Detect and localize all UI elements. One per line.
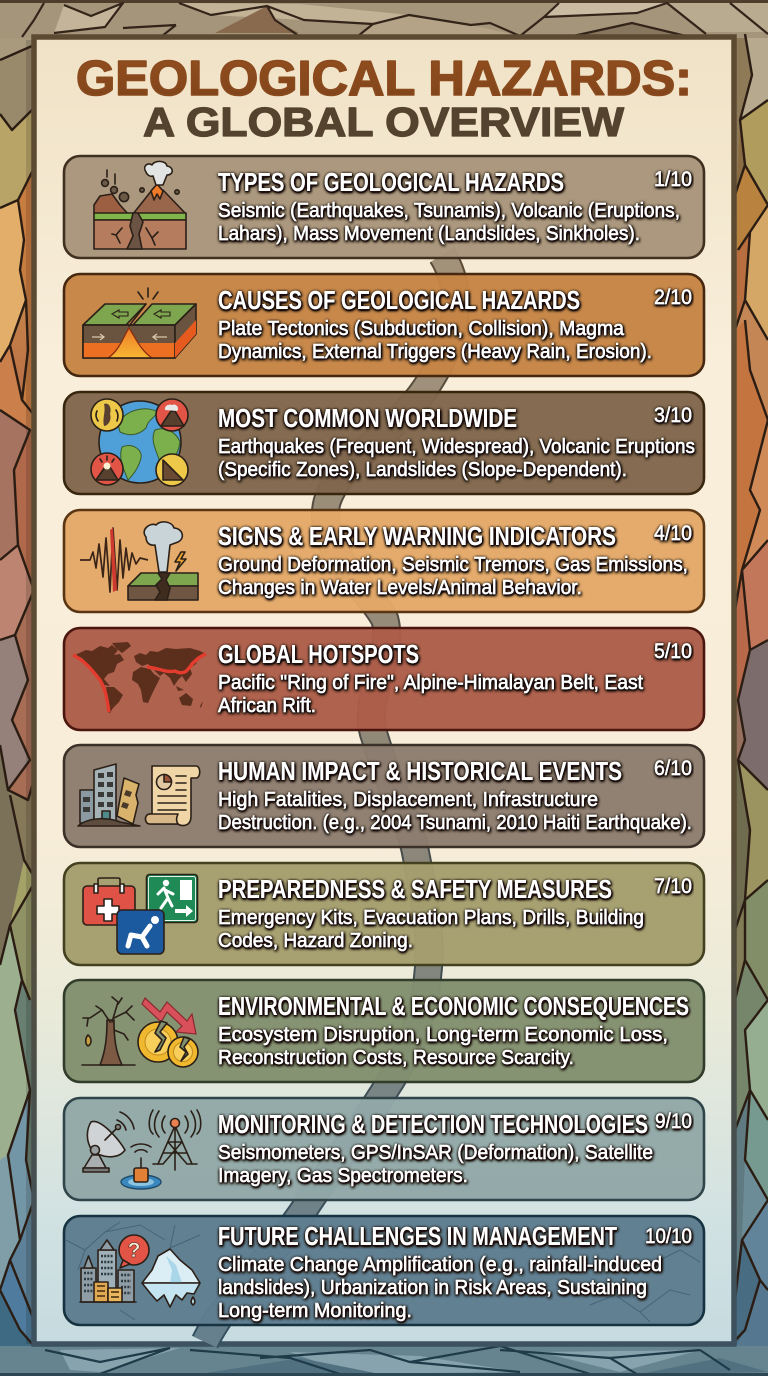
page number: 7/10 <box>654 875 692 898</box>
panel 3: most common worldwide <box>64 392 704 494</box>
heading: CAUSES OF GEOLOGICAL HAZARDS <box>218 287 580 315</box>
page number: 1/10 <box>654 168 692 191</box>
panel 7: preparedness and safety measures <box>64 863 704 965</box>
page number: 3/10 <box>654 404 692 427</box>
description: Imagery, Gas Spectrometers. <box>218 1164 468 1187</box>
page number: 4/10 <box>654 522 692 545</box>
description: Seismic (Earthquakes, Tsunamis), Volcanic (Eruptions, <box>218 199 680 222</box>
panel 10: future challenges in management <box>64 1216 704 1325</box>
title: GEOLOGICAL HAZARDS: <box>76 52 692 106</box>
panel 1: types of geological hazards <box>64 156 704 258</box>
heading: MONITORING & DETECTION TECHNOLOGIES <box>218 1111 648 1139</box>
heading: SIGNS & EARLY WARNING INDICATORS <box>218 523 616 551</box>
heading: HUMAN IMPACT & HISTORICAL EVENTS <box>218 758 622 786</box>
page number: 2/10 <box>654 286 692 309</box>
description: Lahars), Mass Movement (Landslides, Sinkholes). <box>218 222 640 245</box>
description: Ecosystem Disruption, Long-term Economic Loss, <box>218 1023 668 1046</box>
top rock band <box>0 3 768 38</box>
icon: city, question bubble and iceberg <box>80 1235 200 1307</box>
icon: damaged buildings and records scroll <box>78 764 200 826</box>
description: Dynamics, External Triggers (Heavy Rain, Erosion). <box>218 340 652 363</box>
description: Climate Change Amplification (e.g., rainfall-induced <box>218 1253 662 1276</box>
icon: tectonic plates and magma <box>83 288 196 358</box>
page number: 6/10 <box>654 757 692 780</box>
page number: 9/10 <box>655 1110 692 1133</box>
description: Reconstruction Costs, Resource Scarcity. <box>218 1046 574 1069</box>
description: High Fatalities, Displacement, Infrastructure <box>218 788 598 811</box>
description: landslides), Urbanization in Risk Areas, Sustaining <box>218 1276 647 1299</box>
icon: volcano, fissure and falling rocks <box>94 161 186 249</box>
icon: first aid kit, exit sign, drop and cover sign <box>83 874 198 954</box>
description: (Specific Zones), Landslides (Slope-Dependent). <box>218 458 627 481</box>
central crack running behind panels <box>205 255 456 1342</box>
icon: city, question bubble and iceberg: ? <box>128 1239 140 1262</box>
description: Plate Tectonics (Subduction, Collision), Magma <box>218 317 625 340</box>
panel 2: causes of geological hazards <box>64 274 704 376</box>
description: Ground Deformation, Seismic Tremors, Gas Emissions, <box>218 553 688 576</box>
description: Codes, Hazard Zoning. <box>218 929 413 952</box>
description <box>218 199 680 245</box>
description: Destruction. (e.g., 2004 Tsunami, 2010 Haiti Earthquake). <box>218 811 692 834</box>
description: African Rift. <box>218 694 316 717</box>
description <box>218 1141 653 1187</box>
description: Long-term Monitoring. <box>218 1299 412 1322</box>
description: Seismometers, GPS/InSAR (Deformation), Satellite <box>218 1141 653 1164</box>
description: Pacific "Ring of Fire", Alpine-Himalayan Belt, East <box>218 671 643 694</box>
heading: MOST COMMON WORLDWIDE <box>218 405 517 433</box>
title: A GLOBAL OVERVIEW <box>143 99 624 145</box>
panel 9: monitoring and detection technologies <box>64 1098 704 1200</box>
panel 6: human impact and historical events <box>64 745 704 847</box>
icon: dead tree, falling arrow and broken coins <box>82 997 198 1067</box>
description: Earthquakes (Frequent, Widespread), Volcanic Eruptions <box>218 435 695 458</box>
description: Changes in Water Levels/Animal Behavior. <box>218 576 582 599</box>
heading: PREPAREDNESS & SAFETY MEASURES <box>218 876 612 904</box>
title <box>76 52 692 145</box>
description <box>218 435 695 481</box>
description: Emergency Kits, Evacuation Plans, Drills, Building <box>218 906 644 929</box>
description <box>218 317 652 363</box>
page number: 5/10 <box>654 640 692 663</box>
description <box>218 906 644 952</box>
heading: TYPES OF GEOLOGICAL HAZARDS <box>218 169 564 197</box>
panel 5: global hotspots <box>64 628 704 730</box>
panel 4: signs and early warning indicators <box>64 510 704 612</box>
heading: FUTURE CHALLENGES IN MANAGEMENT <box>218 1223 617 1251</box>
icon: globe with hazard badges <box>91 399 188 486</box>
icon: world map with hazard belts <box>73 642 206 713</box>
panel 8: environmental and economic consequences <box>64 980 704 1082</box>
icon: seismogram and gas eruption <box>80 522 198 600</box>
description <box>218 788 692 834</box>
bottom rock band <box>0 1346 768 1376</box>
heading: GLOBAL HOTSPOTS <box>218 641 419 669</box>
side cracks <box>0 46 36 1346</box>
description <box>218 671 643 717</box>
page number: 10/10 <box>645 1225 692 1248</box>
description <box>218 553 688 599</box>
icon: satellite dish, buoy and seismic tower <box>83 1110 201 1189</box>
description <box>218 1253 662 1322</box>
description <box>218 1023 668 1069</box>
